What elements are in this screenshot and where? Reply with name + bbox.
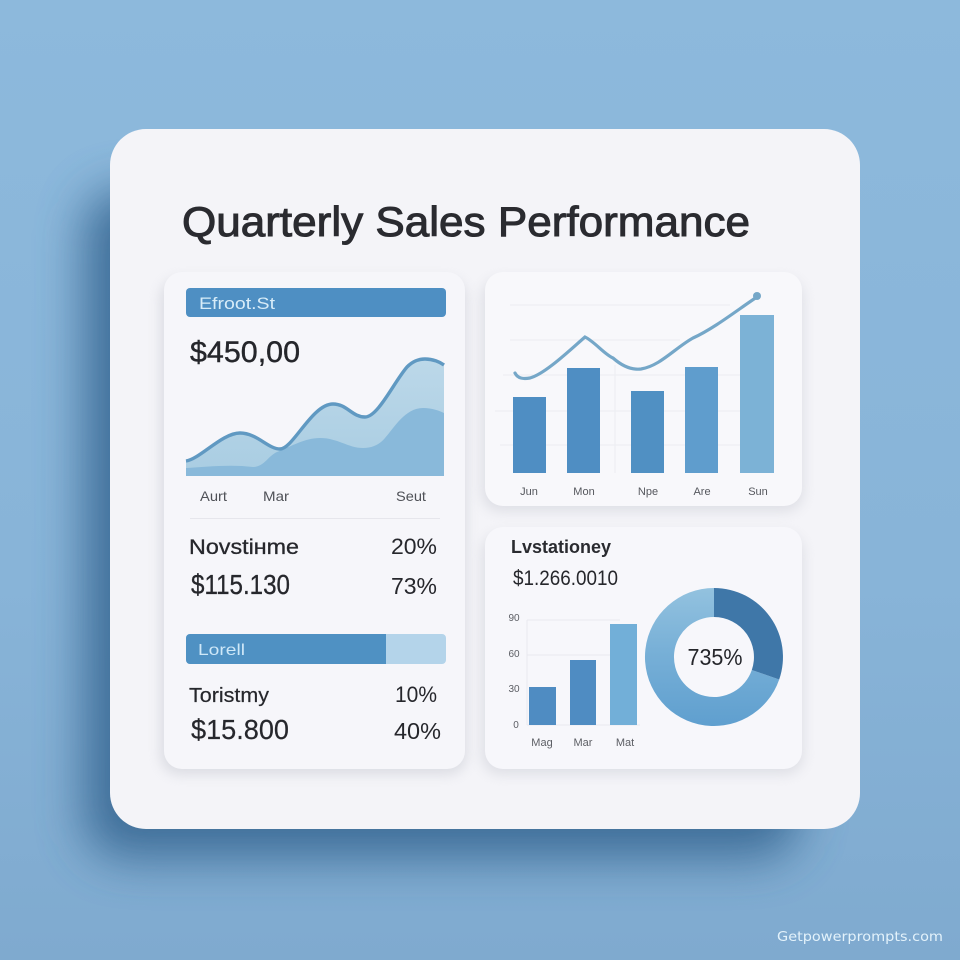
- metric: second row: 40%: [394, 718, 441, 744]
- bar labels: Npe: [638, 486, 658, 498]
- header bar: Efroot.St: [199, 294, 275, 313]
- small bar labels: Mag: [531, 737, 553, 749]
- metric: first row: $115.130: [191, 569, 290, 600]
- donut chart: 735%: [688, 644, 742, 670]
- axis labels: 90: [508, 613, 520, 624]
- watermark: Getpowerprompts.com: [777, 930, 943, 945]
- axis labels: 60: [508, 649, 520, 660]
- main card: [110, 129, 860, 829]
- panel: stationery: [481, 527, 804, 775]
- axis labels: [508, 613, 520, 731]
- small bar labels: Mar: [574, 737, 593, 749]
- panel: combo chart: [481, 272, 804, 512]
- header bar: [186, 288, 446, 317]
- bar labels: Sun: [748, 486, 768, 498]
- panel: left summary: [160, 272, 467, 775]
- area chart labels: Aurt: [200, 488, 227, 504]
- axis labels: 0: [513, 720, 519, 731]
- panel value: $1.266.0010: [513, 567, 618, 590]
- area chart labels: [200, 488, 426, 504]
- axis labels: 30: [508, 684, 520, 695]
- title: Quarterly Sales Performance: [182, 198, 750, 245]
- bar labels: Are: [693, 486, 711, 498]
- area chart labels: Seut: [396, 488, 426, 504]
- progress bar: [186, 634, 446, 664]
- metric: second row: [189, 682, 441, 745]
- bar labels: Jun: [520, 486, 538, 498]
- trend line: [515, 292, 761, 378]
- progress bar: Lorell: [198, 642, 245, 659]
- metric: first row: 20%: [391, 534, 437, 559]
- metric: second row: $15.800: [191, 714, 289, 745]
- donut chart: [645, 588, 783, 726]
- metric: second row: Toristmy: [189, 685, 269, 707]
- bar labels: [520, 486, 768, 498]
- area chart labels: Mar: [263, 488, 289, 504]
- metric: first row: [189, 534, 437, 600]
- small bars: [529, 624, 637, 725]
- small bar labels: Mat: [616, 737, 634, 749]
- small bar labels: [531, 737, 634, 749]
- panel heading: Lvstationey: [511, 537, 611, 557]
- headline value: $450,00: [190, 336, 300, 369]
- metric: first row: 73%: [391, 573, 437, 599]
- bars: [513, 315, 774, 473]
- metric: first row: Novstiнme: [189, 536, 299, 559]
- bar labels: Mon: [573, 486, 595, 498]
- metric: second row: 10%: [395, 682, 437, 707]
- card shadow: [84, 190, 799, 858]
- area chart: [186, 359, 444, 476]
